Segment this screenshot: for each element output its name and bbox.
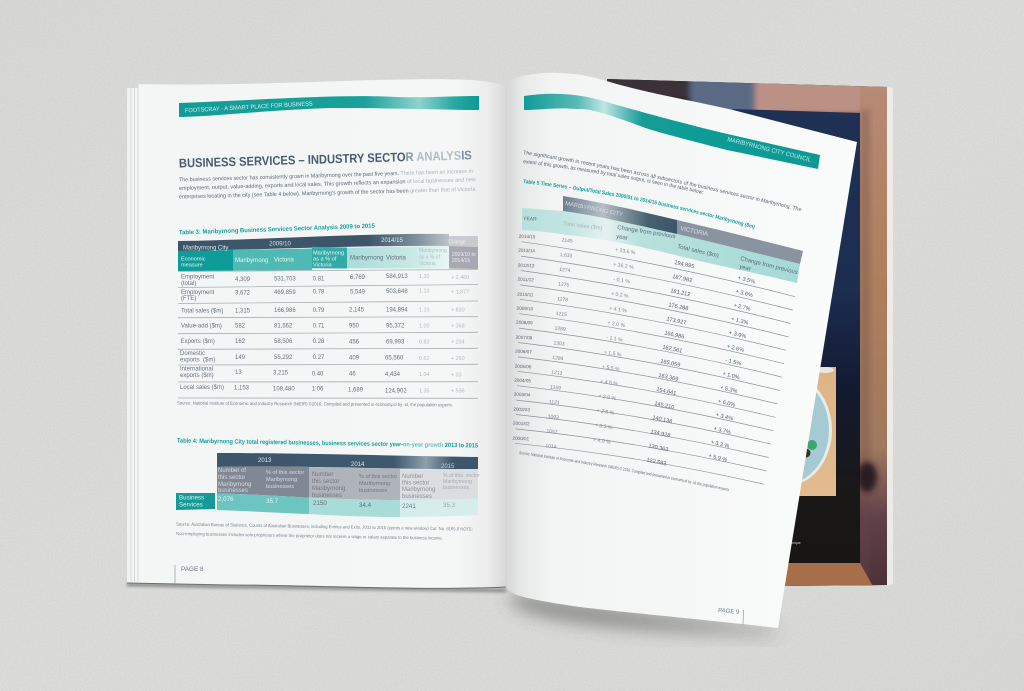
year column: 2013/14 bbox=[518, 248, 535, 253]
Victoria total sales column: 140,136 bbox=[652, 415, 673, 425]
table 4 year band bbox=[217, 453, 478, 469]
Maribyrnong change column: + 2.9 % bbox=[598, 393, 617, 402]
table 3 values: 503,648 bbox=[386, 289, 408, 295]
left page shadow bbox=[127, 583, 506, 592]
Maribyrnong total sales column: 1121 bbox=[549, 399, 560, 406]
Maribyrnong total sales column: 1,633 bbox=[559, 252, 573, 259]
year column: 2008/09 bbox=[516, 320, 533, 325]
table 3 header labels: Maribyrnong bbox=[350, 256, 383, 262]
table 3 faded columns: 1.04 bbox=[419, 372, 430, 378]
photo caption fragment: unique bbox=[790, 541, 801, 545]
table 4 values: Business bbox=[179, 494, 204, 502]
table 4 year labels: 2015 bbox=[441, 464, 455, 470]
table 3 faded columns: + 1,877 bbox=[451, 289, 469, 295]
table 3 values: 95,372 bbox=[386, 323, 405, 329]
table 3 values: 1,315 bbox=[235, 308, 251, 314]
table 3 values: 4,434 bbox=[385, 372, 401, 378]
table 3 values: 69,993 bbox=[386, 339, 405, 345]
table 3 values: 0.81 bbox=[313, 276, 325, 282]
table 4 sub-header labels: Maribyrnong bbox=[402, 487, 435, 493]
Maribyrnong total sales column: 1275 bbox=[558, 282, 570, 289]
table 5 header labels: Total sales ($m) bbox=[563, 221, 603, 232]
table 3 values: 409 bbox=[349, 355, 360, 361]
table 4 sub-header labels: Maribyrnong bbox=[312, 486, 345, 492]
table 3 values: 166,986 bbox=[274, 308, 296, 314]
table 3 values: 65,560 bbox=[385, 356, 404, 362]
Maribyrnong total sales column: 1213 bbox=[551, 370, 563, 377]
table 3 header labels: Maribyrnong bbox=[313, 250, 344, 256]
right page bbox=[506, 72, 857, 628]
Victoria change column: + 1.3% bbox=[730, 316, 749, 326]
table 3 values: 149 bbox=[235, 355, 246, 361]
table 5 title: Table 5 Time Series – Output/Total Sales 2000/01 to 2014/15 business services sector Maribyrnong ($m) bbox=[523, 179, 755, 230]
table 3 header labels: Maribyrnong bbox=[419, 248, 447, 254]
year column: 2010/11 bbox=[517, 292, 534, 297]
Maribyrnong change column: + 4.5 % bbox=[600, 379, 619, 388]
table 4 source note: Non-employing businesses includes sole proprietors where the proprietor does not receive a wage or salary separate to the business income. bbox=[176, 531, 443, 541]
intro paragraph: The business services sector has consistently grown in Maribyrnong over the past five years. There has been an increase in bbox=[179, 169, 473, 183]
photo top band bbox=[607, 79, 881, 113]
table 4 values: 35.3 bbox=[443, 502, 456, 509]
table 3 row labels: Employment bbox=[181, 275, 215, 281]
table 4 sub-header labels: businesses bbox=[402, 494, 432, 500]
table 3 header labels: Maribyrnong bbox=[235, 258, 268, 264]
table 4 values: 35.7 bbox=[266, 498, 279, 505]
year column: 2004/05 bbox=[514, 378, 531, 383]
Maribyrnong change column: + 23.6 % bbox=[615, 247, 636, 256]
table 4 values: 2,076 bbox=[218, 496, 234, 503]
table 3 header labels: 2009/10 to bbox=[452, 252, 476, 258]
page number 9 bbox=[718, 608, 744, 625]
table 5 header labels: year bbox=[616, 234, 628, 242]
page heading: BUSINESS SERVICES – INDUSTRY SECTOR ANALYSIS bbox=[179, 148, 472, 170]
Maribyrnong total sales column: 1057 bbox=[546, 429, 558, 436]
table 3 values: 124,902 bbox=[385, 388, 407, 394]
table 5 header labels: VICTORIA bbox=[680, 226, 708, 238]
table 3 bbox=[178, 234, 478, 398]
table 3 faded columns: + 536 bbox=[451, 389, 465, 395]
Victoria change column: + 2.6% bbox=[726, 344, 745, 354]
left header band bbox=[179, 96, 479, 117]
year column: 2005/06 bbox=[515, 364, 532, 369]
left page bbox=[127, 79, 506, 588]
table 3 values: 162 bbox=[235, 339, 246, 345]
Victoria total sales column: 154,641 bbox=[656, 387, 677, 397]
table 4 sub-header labels: businesses bbox=[218, 488, 248, 494]
table 3 faded columns: 1.10 bbox=[419, 307, 430, 313]
table 3 faded columns: 0.62 bbox=[419, 356, 430, 362]
table 4 data cells bbox=[176, 493, 478, 517]
table 3 row labels: exports ($m) bbox=[180, 373, 214, 379]
table 3 row labels: Total sales ($m) bbox=[181, 309, 223, 315]
Victoria change column: + 1.0% bbox=[722, 371, 740, 381]
table 4 sub-header labels: Number bbox=[312, 472, 333, 478]
table 3 source note: Source: National Institute of Economic and Industry Research (NIEIR) ©2016. Compiled and presented in economy.id by .id, the population experts. bbox=[177, 400, 453, 407]
table 3 header cells bbox=[178, 234, 478, 271]
year column: 2001/02 bbox=[513, 421, 530, 426]
year column: 2009/10 bbox=[516, 306, 534, 311]
table 3 row labels: Value-add ($m) bbox=[181, 324, 222, 330]
table 4 sub-header labels: businesses bbox=[443, 485, 469, 491]
table 4 values: 34.4 bbox=[359, 502, 372, 509]
table 3 header labels: as a % of bbox=[313, 256, 337, 262]
table 3 faded columns: + 260 bbox=[451, 356, 465, 362]
Maribyrnong change column: + 4.1 % bbox=[609, 306, 628, 315]
table 4 sub-header labels: Maribyrnong bbox=[266, 477, 297, 483]
Victoria change column: + 3.3 % bbox=[710, 440, 730, 450]
table 3 faded columns: 1.00 bbox=[419, 323, 430, 329]
table 3 header labels bbox=[181, 238, 476, 269]
table 3 values: 0.28 bbox=[313, 339, 325, 345]
table 3 values: 6,769 bbox=[350, 275, 366, 281]
year column: 2011/12 bbox=[517, 277, 534, 282]
Victoria total sales column: 130,363 bbox=[648, 443, 669, 453]
table 5 source note: Source: National Institute of Economic and Industry Research (NIEIR) © 2016. Compiled and presented in economy.id by .id, the population experts. bbox=[519, 98, 770, 492]
table 5 bbox=[512, 196, 803, 484]
table 5 header cells bbox=[522, 196, 803, 283]
table 5 header labels: year bbox=[739, 264, 751, 273]
table 3 header labels: Victoria bbox=[386, 255, 407, 261]
table 4 values: 2150 bbox=[313, 500, 327, 507]
table 4 values bbox=[179, 494, 456, 510]
table 4 sub-header labels bbox=[218, 468, 480, 500]
table 3 values: 1,689 bbox=[348, 387, 364, 393]
table 4 values: 2241 bbox=[402, 503, 416, 510]
table 5 header labels: Total sales ($m) bbox=[677, 244, 719, 259]
table 3 header labels: Change bbox=[448, 240, 466, 246]
table 3 faded columns: 1.35 bbox=[419, 388, 430, 394]
table 4 sub-header labels: businesses bbox=[266, 484, 294, 490]
table 3 values: 584,913 bbox=[386, 274, 408, 280]
Victoria total sales column: 181,212 bbox=[670, 288, 691, 298]
table 4 sub-header labels: businesses bbox=[359, 488, 387, 494]
table 5 header labels: YEAR bbox=[523, 216, 537, 223]
table 4 bbox=[176, 453, 480, 517]
table 3 values: 81,562 bbox=[274, 324, 293, 330]
table 4 title: Table 4: Maribyrnong City total registered businesses, business services sector year-on-year growth 2013 to 2015 bbox=[177, 438, 479, 449]
Victoria total sales column: 163,369 bbox=[658, 373, 679, 383]
table 5 header labels: Change from previous bbox=[617, 225, 676, 240]
Maribyrnong total sales column: 1215 bbox=[555, 311, 567, 318]
Maribyrnong total sales column: 1274 bbox=[559, 267, 571, 274]
table 3 header labels: 2014/15 bbox=[381, 238, 404, 244]
Maribyrnong change column: - 0.1 % bbox=[613, 277, 631, 285]
table 3 faded columns: 1.10 bbox=[419, 274, 430, 280]
table 3 values: 0.78 bbox=[313, 290, 325, 296]
table 3 values: 531,703 bbox=[274, 277, 296, 283]
table 3 row labels: Local sales ($m) bbox=[180, 385, 224, 391]
right header band: MARIBYRNONG CITY COUNCIL bbox=[727, 136, 812, 164]
table 3 row labels: (FTE) bbox=[181, 296, 196, 302]
Victoria total sales column: 166,986 bbox=[664, 330, 685, 341]
Maribyrnong total sales column bbox=[545, 237, 573, 450]
table 4 source note bbox=[176, 522, 473, 541]
table 3 values: 1.06 bbox=[312, 387, 324, 393]
table 4 sub-header labels: businesses bbox=[312, 493, 342, 499]
table 3 values: 582 bbox=[235, 324, 246, 330]
table 4 sub-header labels: Number bbox=[402, 474, 423, 480]
table 3 values: 55,292 bbox=[274, 355, 293, 361]
table 3 header labels: Victoria bbox=[313, 262, 332, 268]
Maribyrnong total sales column: 1289 bbox=[554, 326, 566, 333]
table 4 source note: Source: Australian Bureau of Statistics, Counts of Australian Businesses, including Entries and Exits, 2011 to 2015 (opens a new window) Cat. No. 8165.0 NOTE: bbox=[176, 522, 473, 532]
Victoria total sales column: 122,583 bbox=[646, 457, 667, 467]
table 4 sub-header cells bbox=[217, 466, 478, 500]
year column: 2006/07 bbox=[515, 349, 532, 354]
page number 8: PAGE 8 bbox=[181, 566, 204, 573]
table 3 values: 950 bbox=[349, 323, 360, 329]
table 3 values bbox=[234, 274, 408, 394]
intro paragraph: enterprises locating in the city (see Table 4 below). Maribyrnong's growth of the sector has been greater than that of Victoria. bbox=[179, 187, 477, 200]
year column: 2012/13 bbox=[518, 263, 535, 268]
Victoria total sales column bbox=[646, 260, 695, 467]
year column: 2003/04 bbox=[514, 392, 531, 397]
table 3 faded columns: 0.83 bbox=[419, 339, 430, 345]
back page white edge bbox=[887, 87, 893, 586]
Victoria change column bbox=[708, 275, 756, 464]
Maribyrnong change column: + 5.5 % bbox=[602, 364, 620, 373]
year column: 2000/01 bbox=[512, 436, 530, 441]
table 3 row rules bbox=[178, 270, 478, 398]
table 4 sub-header labels: Maribyrnong bbox=[443, 479, 472, 485]
Maribyrnong change column bbox=[593, 247, 636, 446]
Victoria total sales column: 176,288 bbox=[668, 302, 689, 312]
table 3 faded columns: + 294 bbox=[451, 339, 465, 345]
table 5 header labels bbox=[523, 201, 798, 276]
Victoria change column: + 3.4% bbox=[715, 412, 734, 422]
table 3 values: 0.71 bbox=[313, 324, 325, 330]
Maribyrnong change column: + 4.0 % bbox=[593, 437, 611, 446]
Victoria change column: + 3.7% bbox=[713, 426, 731, 436]
back cover photo page bbox=[607, 79, 887, 586]
table 3 values: 3,215 bbox=[273, 371, 289, 377]
wood tray with plate bbox=[800, 367, 836, 496]
table 4 sub-header labels: this sector bbox=[402, 480, 429, 486]
right header band bbox=[524, 94, 820, 169]
Victoria change column: + 3.6% bbox=[735, 289, 753, 299]
Maribyrnong change column: + 16.2 % bbox=[613, 262, 634, 271]
table 3 row labels bbox=[180, 275, 224, 391]
table 3 row labels: Employment bbox=[181, 290, 215, 296]
table 3 header labels: Victoria bbox=[274, 258, 295, 264]
Victoria total sales column: 187,982 bbox=[672, 274, 693, 284]
table 3 values: 58,506 bbox=[274, 339, 293, 345]
Victoria change column: + 2.7% bbox=[733, 303, 751, 313]
Maribyrnong total sales column: 1159 bbox=[550, 384, 561, 392]
table 3 header labels: Victoria bbox=[419, 261, 436, 267]
table 3 values: 4,309 bbox=[235, 277, 251, 283]
table 4 sub-header labels: % of this sector bbox=[359, 474, 397, 480]
Maribyrnong change column: + 2.8 % bbox=[596, 408, 615, 417]
table 3 values: 194,894 bbox=[386, 307, 408, 313]
table 3 values: 469,859 bbox=[274, 290, 296, 296]
table 3 faded columns: 1.10 bbox=[419, 289, 430, 295]
table 3 header labels: 2009/10 bbox=[269, 241, 292, 247]
table 3 values: 13 bbox=[235, 370, 242, 376]
table 4 year labels bbox=[258, 458, 455, 470]
table 4 values: Services bbox=[179, 502, 203, 508]
Victoria change column: + 6.0% bbox=[717, 399, 736, 409]
table 3 values: 3,672 bbox=[235, 291, 251, 297]
table 3 faded columns: + 33 bbox=[451, 372, 462, 378]
Victoria change column: + 5.9 % bbox=[708, 453, 728, 464]
Victoria total sales column: 173,927 bbox=[666, 316, 687, 326]
Maribyrnong total sales column: 1284 bbox=[552, 355, 564, 362]
intro paragraph: employment, output, value-adding, exports and local sales. This growth reflects an expansion of local businesses and new bbox=[179, 177, 477, 192]
Victoria total sales column: 145,210 bbox=[654, 401, 675, 411]
table 5 header labels: MARIBYRNONG CITY bbox=[565, 201, 623, 218]
table 3 values: 5,549 bbox=[350, 289, 366, 295]
table 4 sub-header labels: this sector bbox=[218, 475, 245, 481]
Maribyrnong total sales column: 2145 bbox=[561, 237, 573, 245]
table 3 header labels: as a % of bbox=[419, 254, 440, 260]
Maribyrnong total sales column: 1303 bbox=[553, 340, 565, 347]
page number 9: PAGE 9 bbox=[718, 608, 740, 616]
table 3 values: 0.40 bbox=[312, 371, 324, 377]
Victoria total sales column: 162,561 bbox=[662, 345, 683, 355]
table 4 sub-header labels: Maribyrnong bbox=[218, 482, 251, 488]
table 3 values: 0.79 bbox=[313, 308, 325, 314]
table 3 faded columns: + 2,460 bbox=[451, 275, 469, 281]
table 3 row labels: Exports ($m) bbox=[180, 339, 215, 345]
Victoria change column: + 5.3% bbox=[719, 385, 738, 395]
table 3 header labels: 2014/15 bbox=[452, 258, 470, 264]
navy panel bbox=[733, 109, 860, 563]
table 3 values: 108,480 bbox=[273, 386, 295, 392]
Maribyrnong total sales column: 1278 bbox=[557, 296, 569, 303]
right photo strip bbox=[860, 86, 887, 586]
table 4 sub-header labels: % of this sector bbox=[443, 473, 480, 479]
brown lower band bbox=[784, 563, 872, 586]
table 3 header labels: Maribyrnong City bbox=[183, 246, 228, 252]
table 4 year labels: 2014 bbox=[351, 462, 365, 468]
Maribyrnong total sales column: 1014 bbox=[545, 443, 557, 450]
right intro paragraph: The significant growth in recent years has been across all subsectors of the business services sector in Maribyrnong. The bbox=[524, 150, 802, 211]
table 3 title: Table 3: Maribyrnong Business Services Sector Analysis 2009 to 2015 bbox=[179, 223, 375, 236]
table 3 values: 0.27 bbox=[313, 355, 325, 361]
Victoria total sales column: 194,895 bbox=[674, 260, 695, 270]
table 3 header labels: Economic bbox=[181, 257, 206, 263]
table 3 row labels: Domestic bbox=[180, 351, 205, 357]
Victoria change column: + 3.9% bbox=[728, 330, 747, 340]
table 3 values: 2,145 bbox=[349, 308, 365, 314]
table 4 sub-header labels: Number of bbox=[218, 468, 246, 474]
table 4 sub-header labels: % of this sector bbox=[266, 470, 304, 476]
Victoria total sales column: 165,059 bbox=[660, 359, 681, 369]
table 3 faded columns bbox=[419, 274, 469, 395]
intro paragraph bbox=[179, 169, 477, 200]
year column bbox=[512, 234, 536, 441]
right page shadow bbox=[512, 592, 775, 634]
right intro paragraph: extent of this growth, as measured by total sales output, is seen in the table below: bbox=[523, 160, 704, 194]
Maribyrnong change column: + 0.2 % bbox=[611, 291, 629, 300]
page number 8 bbox=[175, 565, 204, 584]
table 3 row labels: exports ($m) bbox=[180, 357, 215, 363]
table 5 row rules bbox=[515, 242, 795, 484]
Maribyrnong change column: - 1.1 % bbox=[606, 335, 623, 344]
table 4 sub-header labels: this sector bbox=[312, 479, 339, 485]
table 3 header labels: measure bbox=[181, 263, 203, 269]
table 3 row labels: International bbox=[180, 367, 213, 373]
table 3 values: 456 bbox=[349, 339, 360, 345]
left header band: FOOTSCRAY - A SMART PLACE FOR BUSINESS bbox=[185, 101, 313, 114]
Victoria change column: + 3.5% bbox=[737, 275, 756, 285]
table 5 header labels: Change from previous bbox=[740, 256, 798, 276]
table 3 values: 1,153 bbox=[234, 385, 250, 391]
year column: 2014/15 bbox=[519, 234, 536, 239]
year column: 2002/03 bbox=[513, 407, 531, 412]
table 3 faded columns: + 368 bbox=[451, 323, 465, 329]
Maribyrnong change column: + 3.3 % bbox=[594, 423, 613, 431]
table 3 values: 46 bbox=[349, 372, 356, 378]
Victoria change column: - 1.5% bbox=[724, 358, 742, 367]
Maribyrnong change column: + 2.0 % bbox=[607, 320, 626, 329]
table 3 row labels: (total) bbox=[181, 281, 196, 287]
table 4 sub-header labels: Maribyrnong bbox=[359, 481, 390, 487]
year column: 2007/08 bbox=[516, 335, 533, 340]
table 3 faded columns: + 830 bbox=[451, 308, 465, 314]
Victoria total sales column: 134,928 bbox=[650, 429, 671, 439]
Maribyrnong change column: + 1.5 % bbox=[603, 350, 622, 358]
Maribyrnong total sales column: 1093 bbox=[547, 414, 559, 421]
table 4 year labels: 2013 bbox=[258, 458, 272, 464]
